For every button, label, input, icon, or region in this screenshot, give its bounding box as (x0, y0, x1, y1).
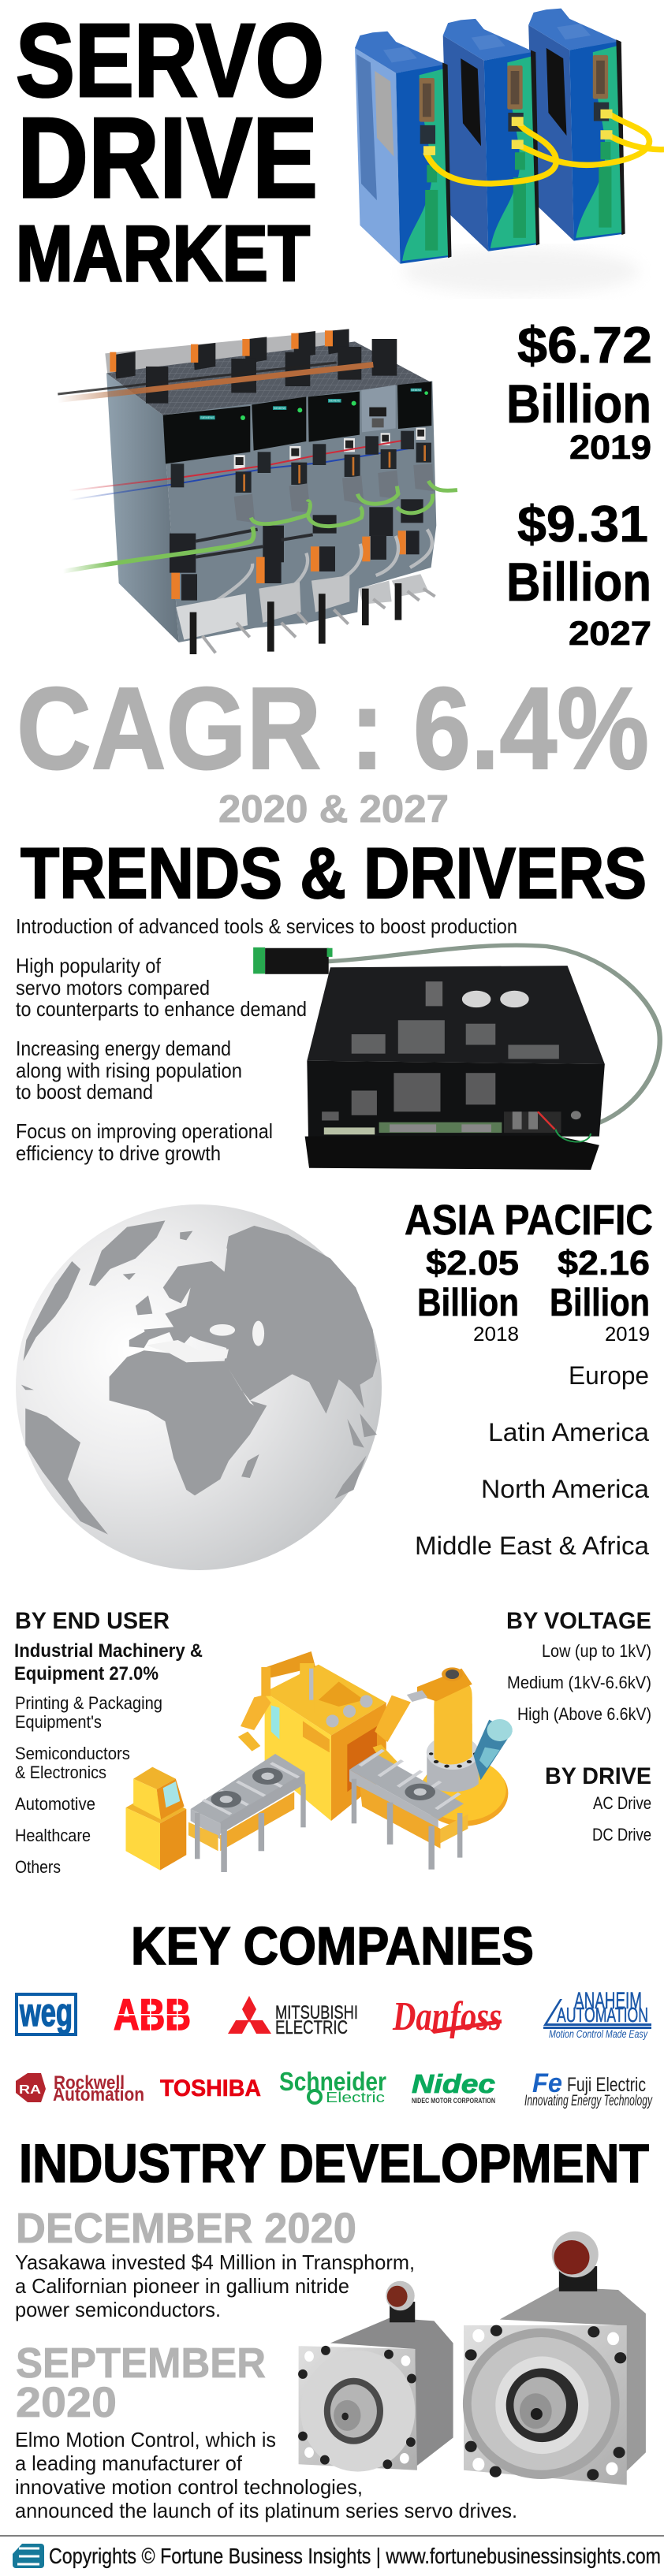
image: blue servo drive modules (355, 9, 664, 294)
segment: by drive: BY DRIVE (545, 1763, 651, 1789)
region: Asia Pacific values: 2019 (605, 1323, 650, 1346)
logo: Fuji Electric (524, 2068, 653, 2109)
logos row 1 (17, 1988, 651, 2040)
footer (13, 2544, 661, 2568)
segment: by end user: BY END USER (15, 1608, 170, 1634)
image: Siemens multi-axis servo drive: SIEMENS (200, 416, 214, 419)
logo: Mitsubishi Electric (228, 1996, 358, 2038)
trends list: High popularity of (16, 954, 162, 977)
trends list: along with rising population (16, 1059, 242, 1082)
development: December 2020: a Californian pioneer in gallium nitride (15, 2274, 349, 2298)
image: black servo amplifier box (253, 945, 660, 1170)
stat: 2027 market size (506, 495, 651, 653)
heading: key companies: KEY COMPANIES (131, 1916, 534, 1976)
logo: Mitsubishi Electric: MITSUBISHI (275, 2002, 358, 2023)
logo: Danfoss: Danfoss (392, 1994, 502, 2039)
logo: Nidec: Nidec (412, 2069, 495, 2098)
image: globe (16, 1204, 382, 1570)
trends list: Introduction of advanced tools & services to boost production (16, 914, 517, 938)
title: DRIVE (17, 94, 318, 221)
development: September 2020: announced the launch of its platinum series servo drives. (15, 2499, 517, 2522)
image: Siemens multi-axis servo drive: SIEMENS (274, 407, 286, 410)
development: December 2020: DECEMBER 2020 (16, 2205, 356, 2252)
trends list (16, 914, 517, 1165)
development: September 2020: 2020 (16, 2379, 117, 2426)
icon: Fortune Business Insights logo (13, 2544, 44, 2568)
segment: by end user (14, 1608, 203, 1877)
segment: by end user: & Electronics (15, 1763, 106, 1782)
title: MARKET (16, 210, 310, 298)
segment: by end user: Automotive (15, 1794, 95, 1814)
logo: Anaheim Automation (543, 1988, 651, 2040)
region list: Latin America (488, 1418, 649, 1446)
logo: Rockwell Automation: Rockwell (54, 2072, 125, 2094)
logo: Schneider Electric: Electric (326, 2090, 385, 2105)
image: Siemens multi-axis servo drive: SIEMENS (329, 400, 341, 403)
logo: Fuji Electric: Fe (532, 2068, 562, 2098)
stat: 2019 market size: $6.72 (517, 316, 652, 374)
logo: Rockwell Automation: RA (19, 2083, 42, 2097)
logo: Rockwell Automation (16, 2072, 144, 2105)
region list: Middle East & Africa (415, 1532, 649, 1560)
trends list: Focus on improving operational (16, 1119, 273, 1143)
segment: by drive (545, 1763, 651, 1845)
region list (415, 1361, 649, 1560)
segment: by end user: Others (15, 1857, 61, 1877)
logo: WEG: weg (19, 1990, 73, 2034)
logos row 2 (16, 2067, 653, 2109)
stat: 2019 market size (506, 316, 652, 467)
development: September 2020 (15, 2340, 517, 2522)
CAGR period: 2020 & 2027 (218, 788, 449, 831)
region: Asia Pacific values: $2.16 (558, 1244, 650, 1282)
region: Asia Pacific values: 2018 (473, 1323, 519, 1346)
trends list: servo motors compared (16, 976, 210, 1000)
segment: by end user: Industrial Machinery & (14, 1640, 203, 1662)
region: Asia Pacific values: Billion (417, 1282, 519, 1324)
region: Asia Pacific values: $2.05 (426, 1244, 519, 1282)
logo: Mitsubishi Electric: ELECTRIC (275, 2017, 348, 2038)
segment: by voltage: High (Above 6.6kV) (517, 1704, 651, 1724)
logo: Nidec (412, 2069, 495, 2105)
segment: by drive: DC Drive (592, 1825, 651, 1845)
title (16, 2, 324, 298)
title: SERVO (16, 2, 324, 118)
development: September 2020: SEPTEMBER (16, 2340, 266, 2387)
segment: by voltage: Low (up to 1kV) (542, 1641, 651, 1661)
development: December 2020: Yasakawa invested $4 Million in Transphorm, (15, 2250, 415, 2274)
logo: Nidec: NIDEC MOTOR CORPORATION (412, 2097, 495, 2105)
segment: by drive: AC Drive (593, 1793, 651, 1813)
stat: 2027 market size: 2027 (569, 615, 651, 653)
logo: Schneider Electric (279, 2067, 386, 2105)
development: September 2020: Elmo Motion Control, which is (15, 2428, 276, 2451)
image: Siemens multi-axis servo drive: SIEMENS (411, 389, 421, 392)
image: Siemens multi-axis servo drive (58, 329, 457, 654)
region list: Europe (569, 1361, 649, 1390)
segment: by end user: Printing & Packaging (15, 1693, 162, 1713)
segment: by voltage: Medium (1kV-6.6kV) (507, 1673, 651, 1692)
development: December 2020 (15, 2205, 415, 2321)
segment: by end user: Semiconductors (15, 1744, 130, 1763)
region: Asia Pacific values (405, 1197, 653, 1346)
logo: ABB: ABB (114, 1990, 191, 2039)
segment: by end user: Healthcare (15, 1826, 91, 1845)
image: servo motors (298, 2232, 646, 2485)
trends list: Increasing energy demand (16, 1037, 231, 1060)
trends list: to counterparts to enhance demand (16, 997, 307, 1021)
segment: by end user: Equipment 27.0% (14, 1663, 159, 1684)
logo: Toshiba: TOSHIBA (160, 2075, 261, 2101)
trends list: to boost demand (16, 1080, 153, 1104)
divider (0, 2535, 664, 2537)
development: September 2020: innovative motion control technologies, (15, 2475, 363, 2499)
trends list: efficiency to drive growth (16, 1141, 221, 1165)
stat: 2027 market size: $9.31 (517, 495, 648, 553)
segment: by end user: Equipment's (15, 1712, 102, 1732)
segment: by voltage (506, 1608, 651, 1724)
stat: 2019 market size: 2019 (569, 429, 651, 467)
image: isometric yellow factory line (125, 1651, 513, 1872)
development: December 2020: power semiconductors. (15, 2298, 221, 2321)
region list: North America (481, 1475, 649, 1503)
logo: Schneider Electric: Schneider (279, 2067, 386, 2096)
development: September 2020: a leading manufacturer of (15, 2451, 243, 2475)
segment: by voltage: BY VOLTAGE (506, 1608, 651, 1634)
logo: Rockwell Automation: Automation (53, 2084, 144, 2105)
